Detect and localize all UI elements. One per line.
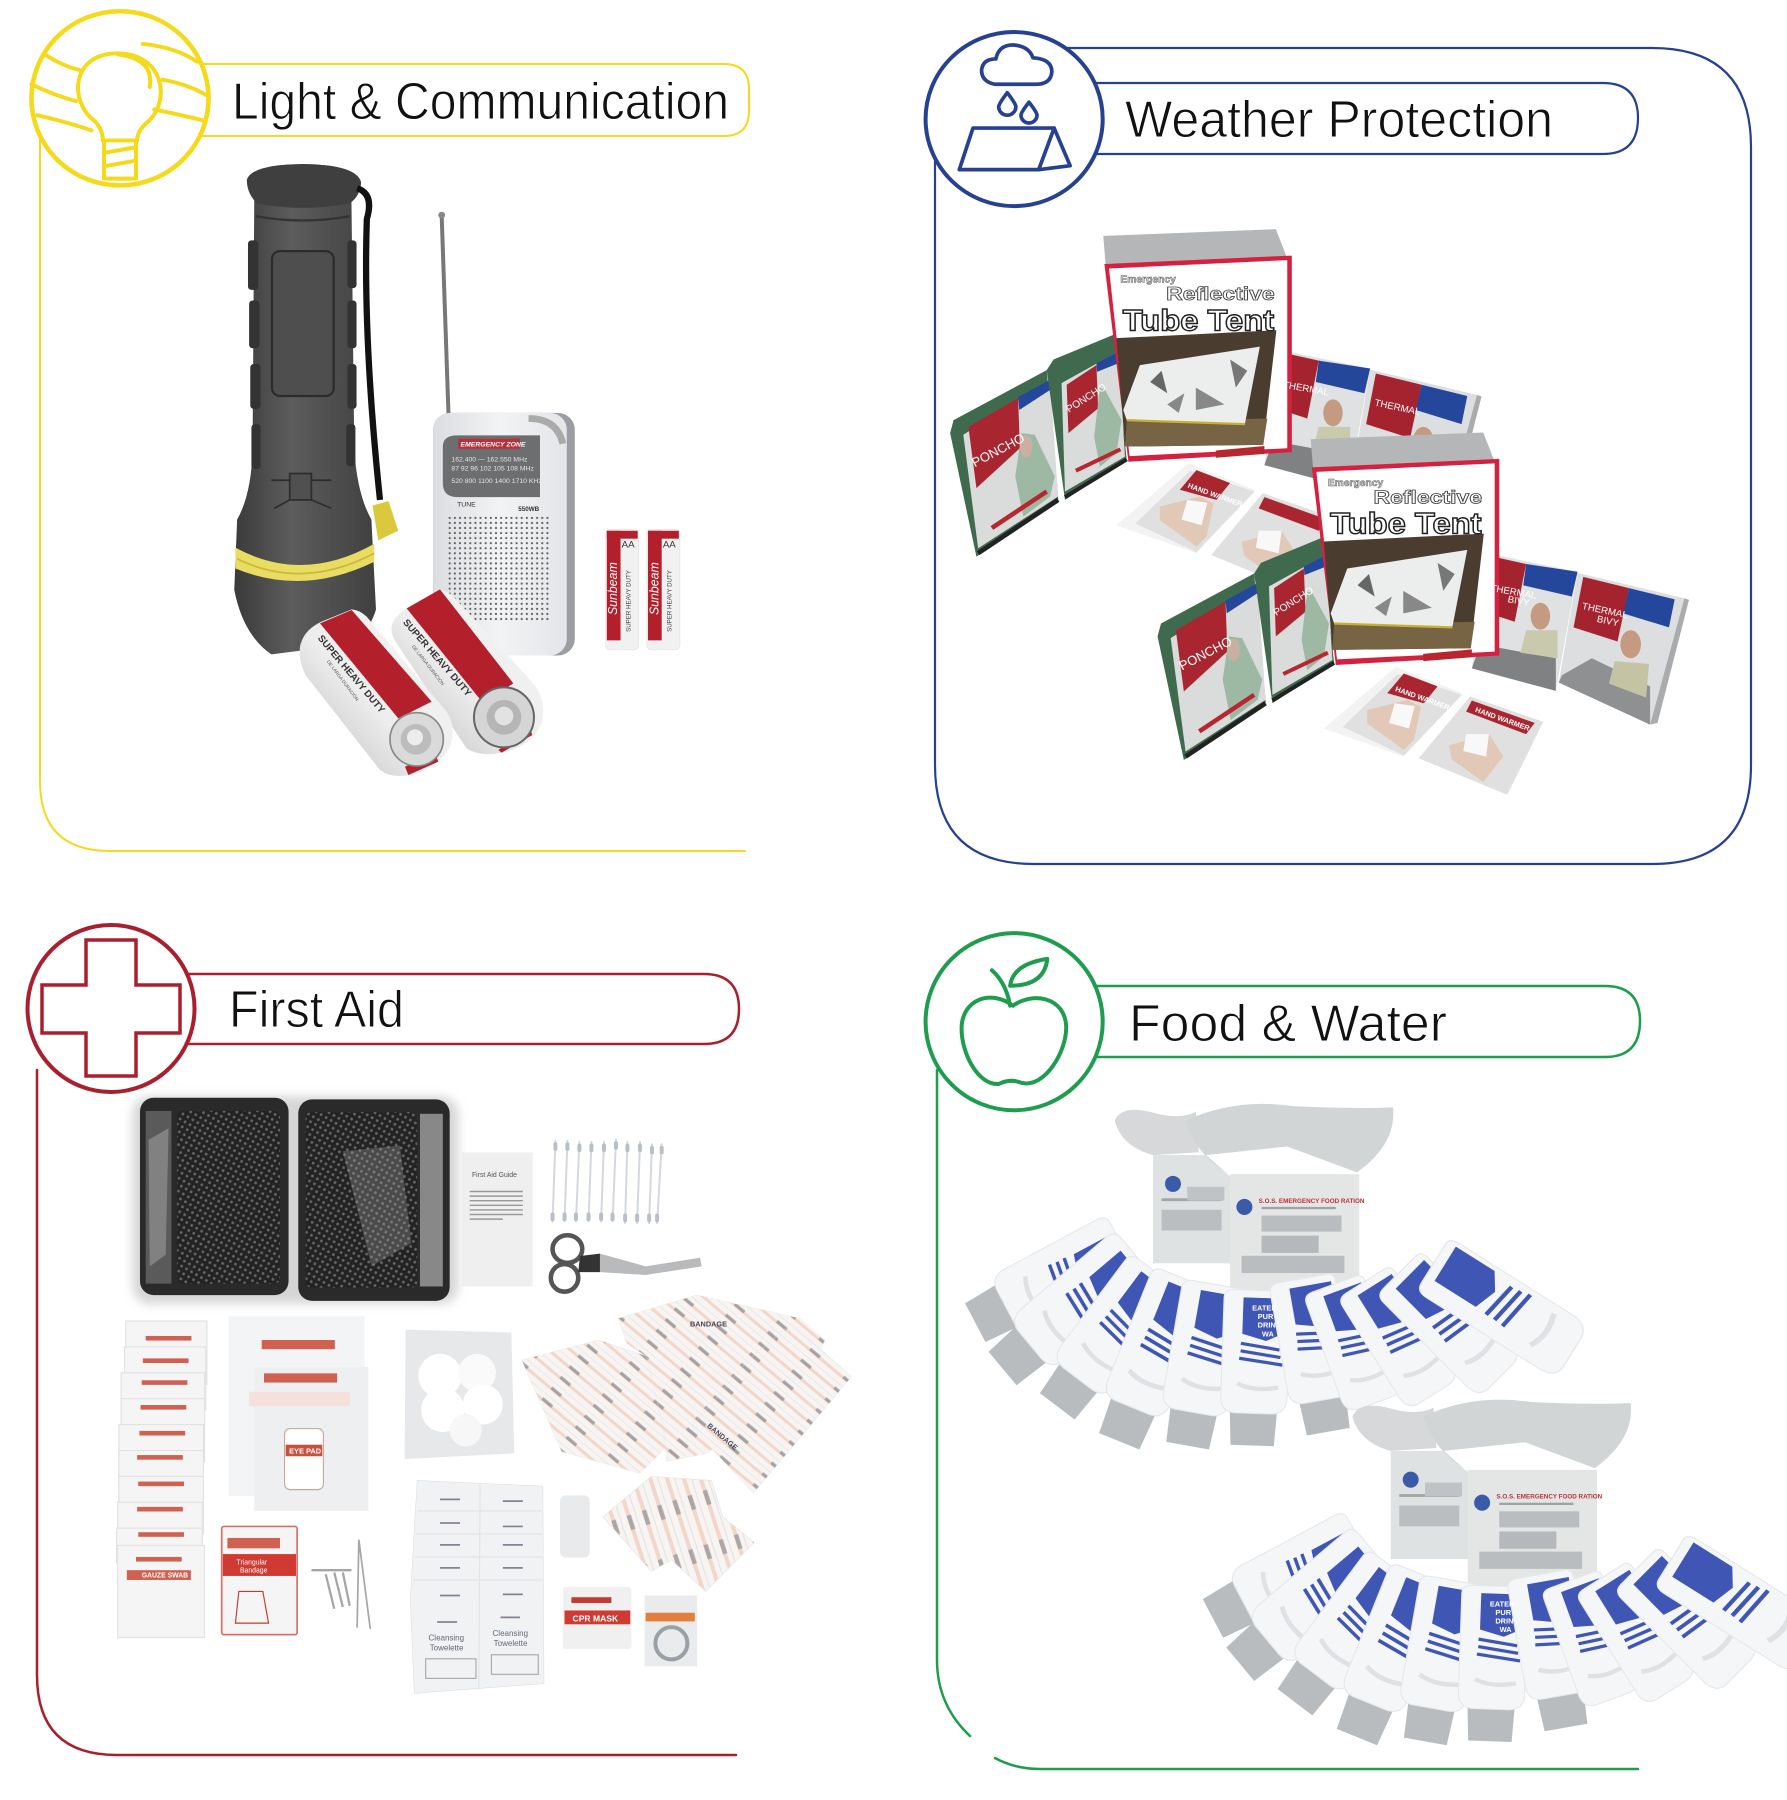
- open bag: [133, 1097, 458, 1304]
- icon: medical cross: [28, 925, 194, 1092]
- D batteries: DE LARGA DURACIÓN: [411, 644, 446, 686]
- second kit: PONCHO: [1176, 634, 1234, 673]
- D batteries: [300, 589, 543, 776]
- heading: First Aid: [229, 981, 404, 1039]
- AA batteries: Sunbeam: [647, 562, 661, 615]
- first kit: PONCHO: [969, 430, 1027, 470]
- radio: 87 92 96 102 105 108 MHz: [451, 466, 535, 473]
- AA batteries: AA: [663, 540, 676, 551]
- triangular bandage: Triangular: [237, 1559, 268, 1566]
- cotton swabs: [553, 1140, 662, 1223]
- small bandages: [603, 1476, 754, 1591]
- icon: rain cloud and tent: [926, 32, 1103, 206]
- second kit: THERMAL: [1581, 601, 1629, 621]
- radio: 520 800 1100 1400 1710 KHz: [451, 478, 542, 485]
- product photo: food rations and water pouches: [960, 1104, 1787, 1750]
- radio: EMERGENCY ZONE: [461, 442, 526, 449]
- panel: weather protection: [926, 32, 1751, 864]
- eye pad dressing: [229, 1316, 369, 1511]
- first ration set: EATER: [1252, 1303, 1277, 1312]
- first aid guide: [462, 1152, 533, 1286]
- second ration set: [1197, 1400, 1787, 1750]
- safety pins and tweezers: [311, 1540, 370, 1629]
- adhesive bandages: large pile: [522, 1295, 852, 1493]
- gauze packets: GAUZE SWAB: [142, 1573, 188, 1580]
- CPR mask: CPR MASK: [573, 1613, 619, 1623]
- first kit: PONCHO: [1065, 382, 1109, 415]
- second kit: PONCHO: [1272, 585, 1316, 619]
- second kit: Tube Tent: [1330, 508, 1482, 541]
- cleansing towelettes: [410, 1480, 544, 1693]
- AA batteries: Sunbeam: [606, 562, 620, 615]
- bottom frame edge: [995, 1758, 1638, 1769]
- outer frame: [935, 48, 1751, 864]
- radio: TUNE: [457, 502, 476, 509]
- adhesive bandages: large pile: BANDAGE: [705, 1421, 740, 1452]
- eye pad dressing: EYE PAD: [289, 1446, 322, 1455]
- second kit: Reflective: [1374, 486, 1482, 507]
- heading: Food & Water: [1129, 995, 1447, 1053]
- cleansing towelettes: Towelette: [430, 1644, 464, 1653]
- cleansing towelettes: Cleansing: [429, 1633, 464, 1642]
- cleansing towelettes: Towelette: [494, 1639, 528, 1648]
- title pill: [150, 974, 739, 1044]
- first ration set: WA: [1262, 1329, 1274, 1338]
- first ration set: DRIN: [1258, 1321, 1276, 1330]
- second ration set: WA: [1500, 1625, 1512, 1634]
- first kit: [950, 229, 1482, 591]
- heading: Light & Communication: [232, 73, 729, 131]
- radio: [433, 212, 575, 656]
- title pill: [150, 64, 749, 136]
- product photo: flashlight, radio and batteries: [234, 164, 680, 776]
- first kit: HAND WARMER: [1187, 481, 1244, 509]
- AA batteries: SUPER HEAVY DUTY: [625, 569, 632, 632]
- second ration set: S.O.S. EMERGENCY FOOD RATION: [1496, 1494, 1603, 1501]
- panel frame: [937, 1070, 970, 1736]
- second kit: Emergency: [1328, 478, 1384, 489]
- radio: 550WB: [518, 506, 540, 513]
- title pill: [1040, 83, 1638, 154]
- panel frame: [40, 130, 745, 851]
- second kit: HAND WARMER: [1394, 684, 1452, 712]
- CPR mask: [563, 1587, 631, 1649]
- panel: food and water: [926, 933, 1787, 1769]
- second kit: [1158, 433, 1689, 795]
- gauze packets: [117, 1321, 207, 1638]
- panel: first aid: [28, 925, 852, 1755]
- D batteries: DE LARGA DURACIÓN: [326, 659, 360, 702]
- first aid guide: First Aid Guide: [472, 1172, 517, 1179]
- adhesive bandages: large pile: BANDAGE: [690, 1320, 727, 1329]
- gauze roll: [560, 1495, 590, 1558]
- triangular bandage: Bandage: [240, 1567, 268, 1574]
- icon: apple: [926, 933, 1103, 1110]
- triangular bandage: [222, 1526, 297, 1635]
- title pill: [1040, 986, 1640, 1057]
- first kit: Emergency: [1120, 275, 1176, 286]
- icon: light bulb: [31, 11, 209, 185]
- first kit: Tube Tent: [1123, 305, 1274, 337]
- AA batteries: [606, 529, 680, 650]
- second ration set: PUR: [1495, 1608, 1512, 1617]
- first kit: Reflective: [1166, 283, 1275, 304]
- D batteries: SUPER HEAVY DUTY: [400, 617, 474, 699]
- scissors: [551, 1235, 702, 1292]
- kit contents group: [117, 1097, 754, 1693]
- medical tape: [645, 1596, 697, 1666]
- product photo: first aid kit contents: [117, 1097, 852, 1693]
- cleansing towelettes: Cleansing: [493, 1629, 528, 1638]
- panel: light and communication: [31, 11, 749, 851]
- second kit: BIVY: [1596, 614, 1620, 629]
- D batteries: SUPER HEAVY DUTY: [315, 633, 387, 716]
- AA batteries: AA: [622, 540, 635, 551]
- flashlight: [234, 164, 398, 654]
- product photo: tents, ponchos, bivies and warmers: [950, 229, 1689, 795]
- heading: Weather Protection: [1125, 91, 1553, 149]
- first ration set: [960, 1104, 1589, 1454]
- panel frame: [37, 1070, 736, 1755]
- AA batteries: SUPER HEAVY DUTY: [666, 569, 673, 632]
- second kit: BIVY: [1507, 594, 1531, 609]
- first ration set: PUR: [1258, 1312, 1274, 1321]
- first kit: THERMAL: [1282, 380, 1330, 399]
- radio: 162.400 — 162.550 MHz: [451, 457, 528, 464]
- first kit: THERMAL: [1373, 398, 1422, 418]
- first ration set: S.O.S. EMERGENCY FOOD RATION: [1259, 1198, 1365, 1205]
- cotton balls bag: [405, 1330, 514, 1459]
- second ration set: DRIN: [1495, 1617, 1513, 1626]
- second kit: HAND WARMER: [1474, 705, 1532, 733]
- second kit: THERMAL: [1490, 583, 1538, 602]
- second ration set: EATER: [1490, 1599, 1515, 1608]
